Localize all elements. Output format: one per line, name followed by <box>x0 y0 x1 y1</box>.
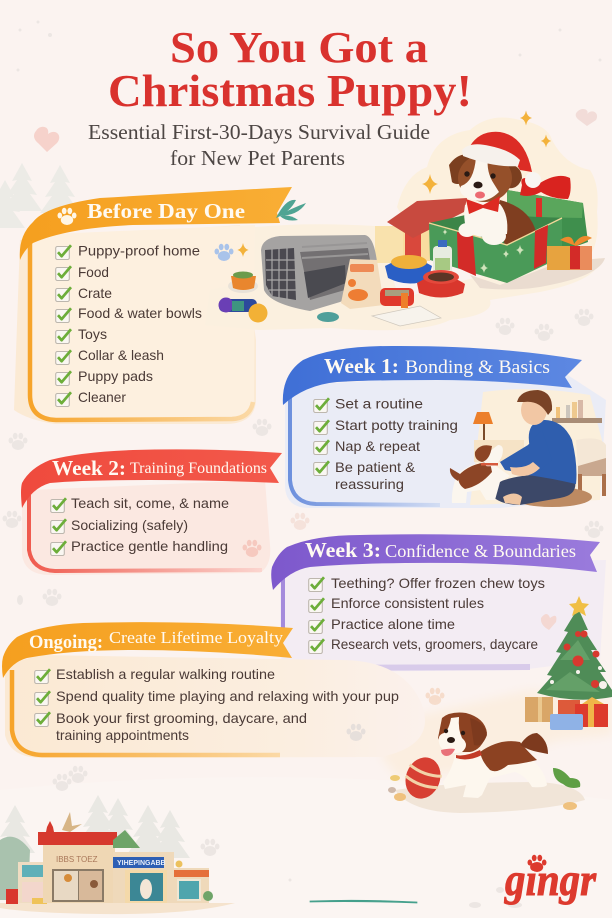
checklist: Be patient & <box>335 459 416 475</box>
checklist: Puppy pads <box>78 368 153 384</box>
green chew toy <box>553 768 580 788</box>
checklist <box>309 575 545 654</box>
panel body <box>22 480 270 575</box>
illustration: puppy with toy <box>388 713 585 813</box>
subtitle: for New Pet Parents <box>170 146 345 170</box>
heading: Week 3: <box>305 538 381 562</box>
checklist <box>314 396 458 492</box>
checklist: Start potty training <box>335 417 458 433</box>
icon: pink paw <box>242 540 262 557</box>
icon: blue paw <box>214 244 234 261</box>
checklist: Book your first grooming, daycare, and <box>56 710 307 726</box>
middle store <box>113 852 174 903</box>
panel: before day one <box>14 187 292 424</box>
banner <box>21 449 282 508</box>
brown back <box>495 200 536 245</box>
banner <box>271 534 600 590</box>
checklist: Food & water bowls <box>78 305 202 321</box>
checklist: Food <box>78 264 109 280</box>
crate <box>261 235 377 311</box>
gifts <box>525 697 608 730</box>
ground <box>0 903 235 914</box>
water bottle <box>433 240 452 274</box>
illustration: storefronts <box>0 795 235 914</box>
checklist: Puppy-proof home <box>78 242 200 258</box>
puppy paws on rim <box>458 223 506 245</box>
brown saddle <box>480 741 537 771</box>
checklist: Practice gentle handling <box>71 538 228 554</box>
blue bowl <box>385 255 432 284</box>
ball toy <box>400 752 446 804</box>
bed <box>576 438 606 468</box>
checklist: Teething? Offer frozen chew toys <box>331 575 545 591</box>
tail <box>520 733 548 754</box>
checklist: Enforce consistent rules <box>331 595 484 611</box>
dog <box>452 462 510 503</box>
title: So You Got a <box>170 23 428 72</box>
checklist: Spend quality time playing and relaxing with your pup <box>56 688 399 704</box>
checklist: Research vets, groomers, daycare <box>331 636 538 652</box>
papers <box>372 306 441 326</box>
panel body <box>280 560 606 672</box>
red dog house <box>375 198 467 263</box>
heading <box>324 354 550 378</box>
checklist: Establish a regular walking routine <box>56 666 275 682</box>
panel: week 1 <box>283 346 606 508</box>
banner <box>283 346 582 405</box>
panel: week 2 <box>21 449 282 575</box>
background trees <box>0 795 190 858</box>
cream halo <box>397 118 598 256</box>
tan ground <box>205 224 600 330</box>
collar <box>380 288 414 308</box>
puppy <box>449 132 541 245</box>
sparkles <box>237 110 551 257</box>
checklist: Socializing (safely) <box>71 517 188 533</box>
box interior <box>429 214 562 245</box>
heading: Confidence & Boundaries <box>385 541 576 561</box>
heading <box>29 628 284 653</box>
checklist: training appointments <box>56 727 189 743</box>
back gift box <box>507 190 588 252</box>
teal line <box>310 900 417 903</box>
subtitle: Essential First-30-Days Survival Guide <box>88 120 430 144</box>
checklist <box>35 666 399 743</box>
food bag <box>341 259 384 309</box>
panel: ongoing <box>2 622 425 758</box>
bow tie <box>466 196 500 214</box>
checklist: Toys <box>78 326 107 342</box>
big bow <box>520 176 571 199</box>
man <box>487 475 575 505</box>
heading: Week 2: <box>52 456 126 480</box>
red bowl <box>417 270 465 298</box>
background trees top left <box>0 163 80 228</box>
panel body <box>5 655 425 758</box>
checklist <box>51 495 229 556</box>
white chest <box>464 202 507 238</box>
small gift <box>547 236 592 270</box>
leaf sprig <box>276 200 306 220</box>
heading: Week 1: <box>324 354 399 378</box>
pebbles <box>388 775 577 810</box>
santa hat <box>470 132 532 172</box>
banner icon: paw <box>58 208 76 225</box>
banner <box>2 622 293 678</box>
checklist: reassuring <box>335 476 404 492</box>
heading: Bonding & Basics <box>405 357 550 378</box>
heading: Ongoing: <box>29 633 103 653</box>
checklist: Cleaner <box>78 389 126 405</box>
small toys <box>218 272 339 322</box>
heading <box>52 456 267 480</box>
main store: IBBS TOEZ <box>56 855 98 864</box>
hearts <box>541 614 556 630</box>
hearts <box>34 109 597 152</box>
checklist: Practice alone time <box>331 616 455 632</box>
body <box>443 751 547 798</box>
panel body <box>285 370 606 508</box>
checklist: Set a routine <box>335 396 423 412</box>
middle store: YIHEPINGABB <box>117 860 166 867</box>
subtitle <box>88 120 430 170</box>
heading: Create Lifetime Loyalty <box>109 628 284 647</box>
shrub behind store <box>113 830 140 848</box>
tree star <box>569 596 589 616</box>
logo: gingr: gingr <box>504 854 597 905</box>
illustration: puppy in gift box with supplies <box>205 110 605 330</box>
heading <box>305 538 576 562</box>
heading: Training Foundations <box>130 460 267 477</box>
checklist: Teach sit, come, & name <box>71 495 229 511</box>
left store <box>6 862 49 904</box>
main store <box>38 812 117 903</box>
banner <box>20 187 292 260</box>
illustration: man with puppy <box>450 389 606 507</box>
head <box>438 713 487 752</box>
title: Christmas Puppy! <box>108 65 472 116</box>
ground wedge behind tree and puppy <box>380 690 612 780</box>
checklist: Nap & repeat <box>335 438 420 454</box>
title <box>108 23 472 116</box>
right store <box>174 860 213 903</box>
checklist: Collar & leash <box>78 347 164 363</box>
rug <box>512 487 592 507</box>
panel body <box>14 225 256 424</box>
ground <box>395 782 585 813</box>
gift box front <box>429 218 562 283</box>
checklist: Crate <box>78 285 112 301</box>
head <box>449 154 470 184</box>
checklist <box>56 242 202 406</box>
background paw near path <box>346 724 366 741</box>
illustration: christmas tree and gifts <box>525 596 612 730</box>
panel: week 3 <box>271 534 606 672</box>
heading: Before Day One <box>87 199 245 223</box>
